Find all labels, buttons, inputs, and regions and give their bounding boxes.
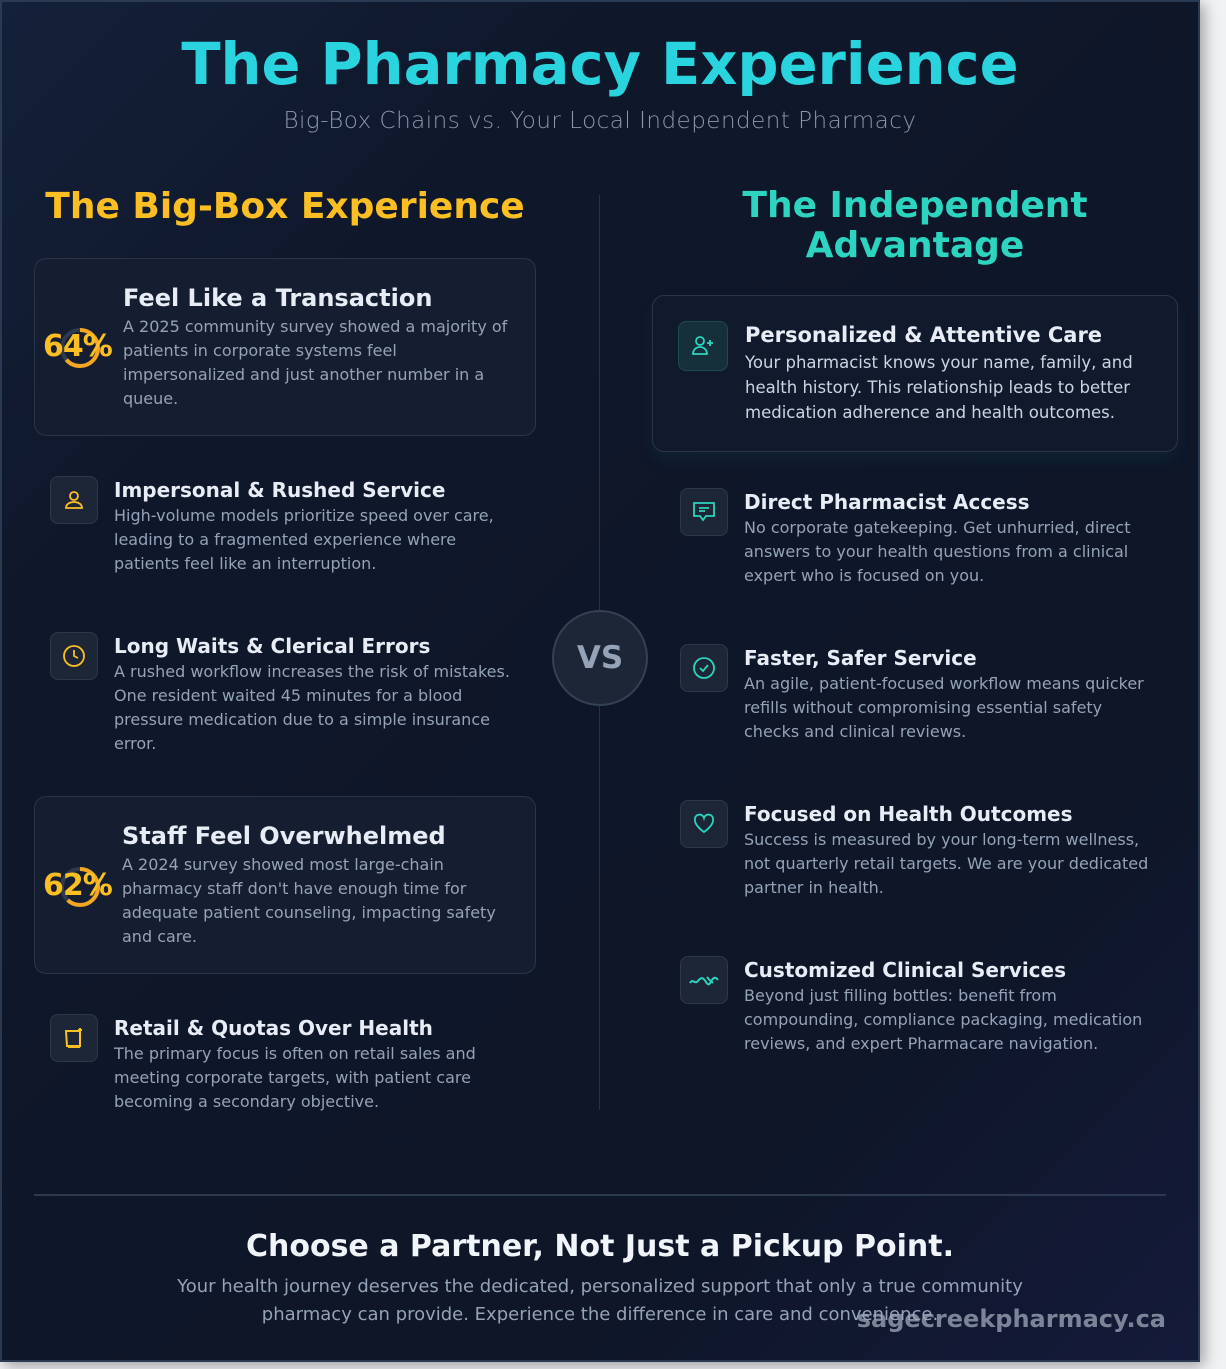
item: impersonal: High-volume models prioritize speed over care, leading to a fragmented experience where patients feel like an interruption. (114, 506, 494, 573)
subtitle: Big-Box Chains vs. Your Local Independent Pharmacy (283, 108, 917, 134)
item: faster safer (680, 644, 1144, 741)
item: clinical services (680, 956, 1142, 1053)
item: faster safer: An agile, patient-focused workflow means quicker refills without compromising essential safety checks and clinical reviews. (744, 674, 1144, 741)
title: The Pharmacy Experience (181, 31, 1019, 98)
card: feel like a transaction: A 2025 community survey showed a majority of patients in corporate systems feel impersonalized and just another number in a queue. (123, 317, 507, 408)
left heading: The Big-Box Experience (45, 186, 525, 227)
right heading: Advantage (806, 225, 1024, 266)
item: faster safer: Faster, Safer Service (744, 646, 977, 670)
item: impersonal: Impersonal & Rushed Service (114, 478, 445, 502)
right heading: The Independent (742, 185, 1088, 226)
item: direct access (680, 488, 1130, 585)
icon: clock (50, 632, 98, 680)
card: staff overwhelmed (34, 796, 536, 974)
stat 64%: 64% (43, 329, 112, 364)
icon: check circle (680, 644, 728, 692)
icon: squiggle (680, 956, 728, 1004)
item: health outcomes (680, 800, 1148, 897)
icon: person (50, 476, 98, 524)
item: health outcomes: Focused on Health Outcomes (744, 802, 1072, 826)
card: personalized care: Personalized & Attentive Care (745, 323, 1102, 347)
icon: heart (680, 800, 728, 848)
item: retail: The primary focus is often on retail sales and meeting corporate targets, with patient care becoming a secondary objective. (114, 1044, 476, 1111)
right heading (742, 185, 1088, 266)
card: feel like a transaction: Feel Like a Transaction (123, 284, 432, 312)
item: long waits: Long Waits & Clerical Errors (114, 634, 430, 658)
card: personalized care: Your pharmacist knows your name, family, and health history. This relationship leads to better medication adherence and health outcomes. (745, 353, 1133, 422)
icon: user plus (678, 321, 728, 371)
item: clinical services: Beyond just filling bottles: benefit from compounding, compliance packaging, medication reviews, and expert Pharmacare navigation. (744, 986, 1142, 1053)
item: clinical services: Customized Clinical Services (744, 958, 1066, 982)
card: staff overwhelmed: Staff Feel Overwhelmed (122, 822, 446, 850)
vs badge: VS (577, 640, 623, 676)
icon: receipt (50, 1014, 98, 1062)
stat 62%: 62% (43, 868, 112, 903)
footer divider (34, 1194, 1166, 1196)
item: direct access: No corporate gatekeeping. Get unhurried, direct answers to your health questions from a clinical expert who is focused on you. (744, 518, 1130, 585)
item: health outcomes: Success is measured by your long-term wellness, not quarterly retail targets. We are your dedicated partner in health. (744, 830, 1148, 897)
footer heading: Choose a Partner, Not Just a Pickup Point. (246, 1229, 954, 1264)
card: feel like a transaction (34, 258, 536, 436)
item: long waits: A rushed workflow increases the risk of mistakes. One resident waited 45 minutes for a blood pressure medication due to a simple insurance error. (114, 662, 510, 753)
card: personalized care (652, 295, 1178, 452)
card: staff overwhelmed: A 2024 survey showed most large-chain pharmacy staff don't have enough time for adequate patient counseling, impacting safety and care. (122, 855, 496, 946)
item: long waits (50, 632, 510, 753)
vs badge (552, 610, 648, 706)
icon: chat (680, 488, 728, 536)
item: retail: Retail & Quotas Over Health (114, 1016, 433, 1040)
item: retail (50, 1014, 476, 1111)
watermark: sagecreekpharmacy.ca (857, 1305, 1166, 1333)
item: impersonal (50, 476, 494, 573)
divider line (599, 195, 600, 1110)
item: direct access: Direct Pharmacist Access (744, 490, 1030, 514)
footer text: Your health journey deserves the dedicated, personalized support that only a true community pharmacy can provide. Experience the difference in care and convenience. (177, 1276, 1023, 1325)
